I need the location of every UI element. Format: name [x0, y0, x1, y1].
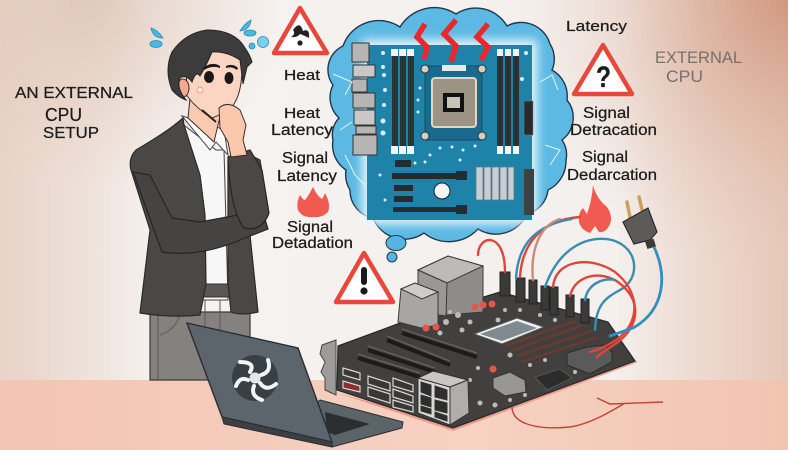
labels left of the cloud: Signal	[287, 219, 333, 236]
label: external cpu: EXTERNAL	[655, 48, 742, 67]
small chips	[493, 372, 526, 396]
labels right of the cloud: Dedarcation	[567, 167, 657, 184]
capacitors	[422, 300, 496, 372]
ram slots	[505, 321, 598, 362]
laptop base	[290, 400, 403, 447]
electric arcs	[333, 74, 560, 185]
io panel	[343, 368, 413, 412]
labels right of the cloud: Signal	[582, 149, 628, 166]
icon: flame	[579, 185, 611, 233]
warning triangle: fan	[274, 8, 327, 53]
labels left of the cloud	[271, 67, 353, 252]
labels left of the cloud: Signal	[282, 150, 328, 167]
side connector	[524, 169, 534, 215]
cables	[478, 217, 662, 357]
sweat on cheek	[197, 87, 203, 93]
heatsink	[476, 167, 514, 200]
labels left of the cloud: Detadation	[272, 235, 353, 252]
cable connectors	[500, 272, 589, 323]
title: an external cpu setup: AN EXTERNAL	[15, 85, 133, 102]
white hole	[434, 183, 450, 199]
heat zigzags	[417, 20, 488, 62]
cpu chip	[474, 318, 544, 344]
network block	[418, 371, 469, 425]
eyes and brows	[203, 64, 238, 84]
tall heat block	[418, 256, 483, 316]
plug	[623, 197, 657, 249]
board glow	[362, 40, 537, 224]
warning triangle: question: ?	[596, 61, 611, 94]
hair	[168, 30, 252, 100]
small block	[398, 283, 438, 328]
shirt	[180, 122, 228, 300]
circuit board	[367, 45, 532, 220]
expansion slots	[358, 333, 477, 377]
ram slots	[392, 56, 519, 146]
board shadow	[337, 358, 638, 431]
cpu socket	[421, 65, 486, 140]
neck	[188, 98, 222, 142]
hand	[219, 104, 247, 157]
board dots	[378, 51, 528, 202]
bracket	[320, 340, 336, 395]
expansion slots	[392, 160, 467, 214]
labels right of the cloud	[567, 105, 657, 184]
label: external cpu	[655, 48, 742, 86]
face	[186, 45, 242, 118]
board	[337, 292, 635, 428]
title: an external cpu setup	[15, 85, 133, 142]
label: latency: Latency	[566, 18, 628, 35]
io ports	[352, 43, 377, 155]
labels right of the cloud: Signal	[583, 105, 630, 122]
ear	[177, 79, 189, 97]
crossed arm	[133, 172, 268, 253]
trousers	[150, 312, 250, 380]
belt	[200, 284, 230, 297]
desk wire	[512, 398, 663, 428]
shirt collar	[182, 116, 228, 155]
desk	[0, 380, 788, 450]
laptop	[187, 323, 403, 447]
labels left of the cloud: Latency	[277, 168, 337, 185]
external motherboard	[320, 217, 663, 431]
icon: flame	[297, 187, 329, 217]
labels left of the cloud: Latency	[271, 122, 333, 139]
thought cloud	[328, 8, 573, 242]
labels left of the cloud: Heat	[284, 67, 321, 84]
title: an external cpu setup: SETUP	[43, 125, 99, 142]
sweat drops	[150, 20, 268, 49]
keyboard	[325, 412, 370, 435]
fan logo	[232, 355, 278, 401]
title: an external cpu setup: CPU	[45, 105, 82, 125]
ram clips	[391, 49, 519, 154]
power connector	[524, 101, 533, 135]
connector	[567, 345, 612, 374]
thought bubbles	[386, 236, 406, 262]
warning triangle: exclamation	[336, 253, 393, 302]
forearm	[228, 150, 269, 229]
jaw shadow	[202, 110, 216, 122]
person	[130, 30, 269, 380]
label: external cpu: CPU	[666, 67, 703, 86]
laptop lid	[187, 323, 332, 442]
labels left of the cloud: Heat	[284, 105, 321, 122]
lid front edge	[222, 417, 332, 447]
jacket	[130, 118, 206, 316]
warning triangle: question	[574, 45, 632, 94]
labels right of the cloud: Detracation	[570, 122, 657, 139]
